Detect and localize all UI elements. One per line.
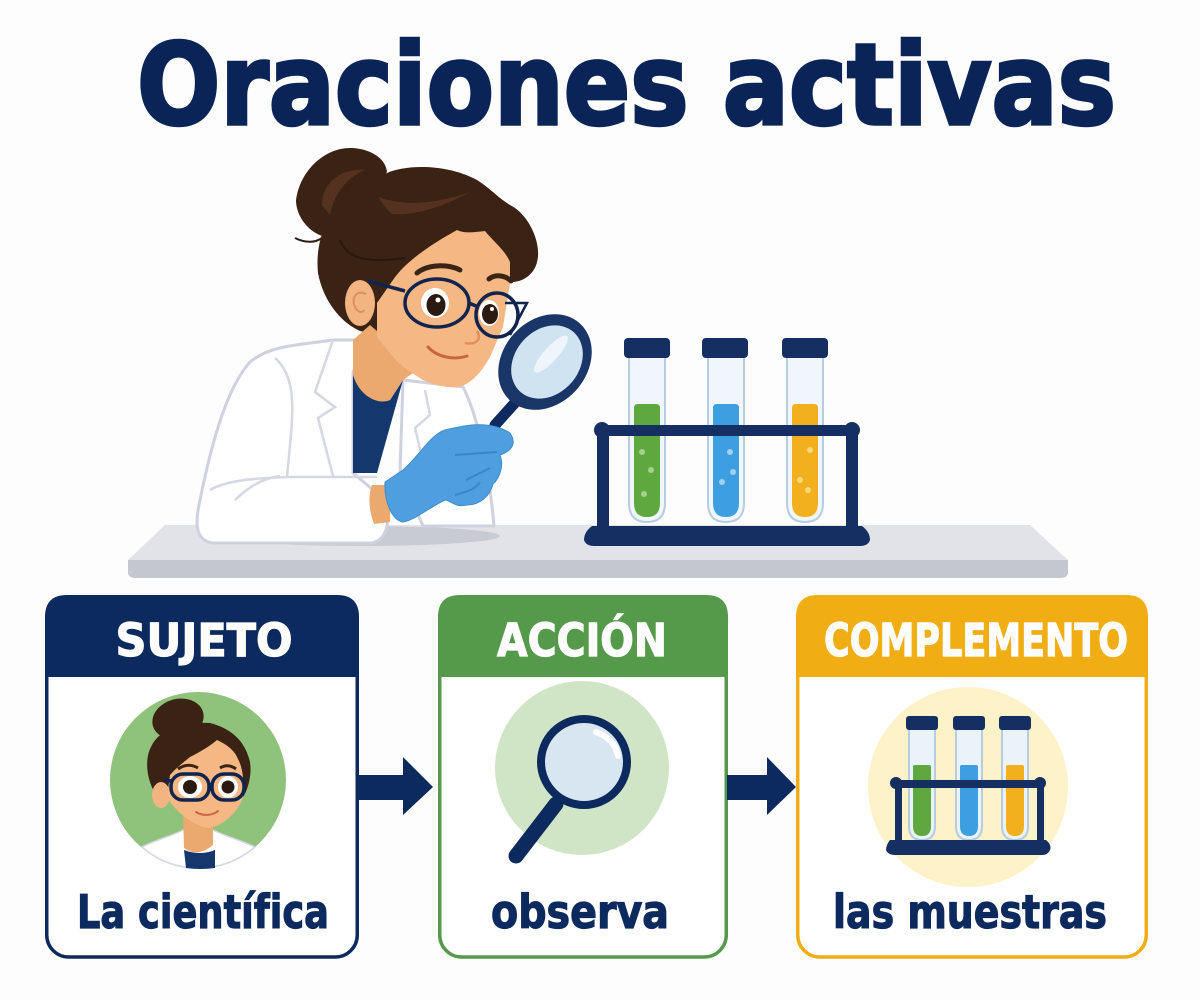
lab coat <box>197 340 494 543</box>
label: observa <box>491 885 669 939</box>
coat <box>142 830 255 868</box>
portrait circle <box>110 692 286 869</box>
arrow 1 <box>359 757 433 815</box>
card frame <box>798 597 1146 957</box>
scientist illustration <box>197 148 611 543</box>
mini rack icon <box>868 687 1068 887</box>
bun <box>148 693 208 745</box>
mini tube green <box>906 716 938 840</box>
face <box>377 230 510 387</box>
ear <box>345 280 375 326</box>
eyebrows mini <box>178 765 236 769</box>
navy shirt <box>353 370 403 473</box>
arrow 2 <box>727 757 796 815</box>
eyes <box>421 288 499 326</box>
mini tube yellow <box>999 716 1031 840</box>
heading: ACCIÓN <box>497 614 667 667</box>
panel: accion <box>438 595 728 957</box>
card header <box>796 595 1148 677</box>
hair <box>317 167 538 340</box>
glasses <box>164 774 246 800</box>
green tube <box>624 338 670 522</box>
nose <box>465 331 479 343</box>
blue glove <box>385 425 513 522</box>
hair bun <box>295 148 387 242</box>
wrist <box>369 485 390 524</box>
mouth <box>428 347 467 358</box>
yellow tube <box>782 338 828 522</box>
lab bench <box>128 525 1068 578</box>
test tubes with rack <box>584 338 870 546</box>
card frame <box>440 597 726 957</box>
shirt <box>184 850 215 869</box>
card header <box>438 595 728 677</box>
mini rack <box>886 777 1050 855</box>
magnifying glass <box>479 295 611 429</box>
blue tube <box>702 338 748 522</box>
smile <box>196 811 218 815</box>
glasses <box>368 279 527 337</box>
mini tube blue <box>953 716 985 840</box>
face <box>167 740 243 828</box>
rack <box>584 422 870 546</box>
heading: SUJETO <box>116 614 292 667</box>
hair <box>147 723 251 800</box>
card header <box>45 595 359 677</box>
card frame <box>47 597 357 957</box>
magnifier icon <box>495 681 669 856</box>
eyebrows <box>417 266 511 281</box>
neck <box>353 325 420 402</box>
panel: sujeto <box>45 595 359 957</box>
label: La científica <box>77 885 329 939</box>
ear <box>152 782 170 808</box>
neck <box>183 812 213 852</box>
panel: complemento <box>796 595 1148 957</box>
label: las muestras <box>833 885 1107 939</box>
